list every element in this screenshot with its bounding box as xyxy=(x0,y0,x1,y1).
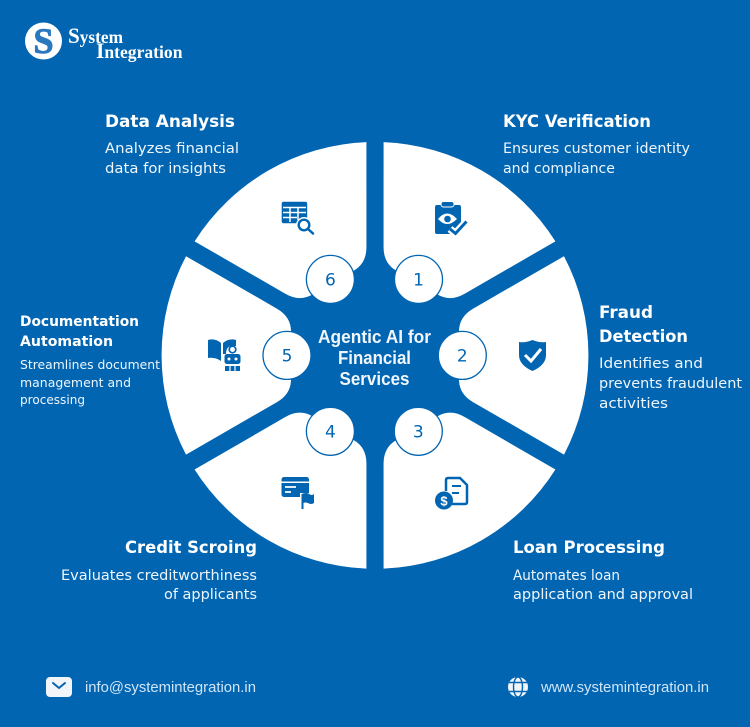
icon: document with dollar coin xyxy=(435,478,467,510)
icon: table with magnifier xyxy=(282,202,313,234)
text block: Documentation Automation xyxy=(20,314,160,407)
text block: KYC Verification: and compliance xyxy=(503,161,615,177)
icon: credit card with flag xyxy=(282,477,315,509)
logo: System Integration: Integration xyxy=(96,38,182,63)
text block: Documentation Automation: Documentation xyxy=(20,314,139,330)
text block: Fraud Detection xyxy=(599,303,743,412)
text block: Loan Processing xyxy=(513,538,693,603)
segment 5 xyxy=(162,256,291,455)
text block: Fraud Detection: activities xyxy=(599,396,668,412)
text block: KYC Verification: KYC Verification xyxy=(503,112,651,132)
badge 1: 1 xyxy=(413,270,424,290)
badge 4: 4 xyxy=(325,422,336,442)
badge 3 xyxy=(394,407,442,455)
text block: Credit Scroing xyxy=(61,538,257,603)
text block: Data Analysis: Analyzes financial xyxy=(105,141,239,157)
badge 4 xyxy=(306,407,354,455)
icon: globe xyxy=(508,677,528,697)
badge 2: 2 xyxy=(457,346,468,366)
text block: Data Analysis xyxy=(105,112,239,177)
icon: shield with check xyxy=(519,340,546,371)
segment 6 xyxy=(182,121,419,332)
text block: Fraud Detection: Detection xyxy=(599,327,688,347)
text block: Loan Processing: application and approval xyxy=(513,587,693,603)
text block: Documentation Automation: Streamlines document xyxy=(20,357,160,372)
text block: Loan Processing: Automates loan xyxy=(513,568,620,584)
segment 1 xyxy=(331,121,568,332)
email address: info@systemintegration.in xyxy=(85,680,256,696)
logo: System Integration: System xyxy=(68,23,123,48)
icon: email xyxy=(46,677,72,697)
badge 2 xyxy=(438,331,486,379)
badge 6 xyxy=(306,255,354,303)
icon: clipboard with eye and check xyxy=(435,202,466,234)
text block: Credit Scroing: Credit Scroing xyxy=(125,538,257,558)
segment 2 xyxy=(459,256,588,455)
text block: Credit Scroing: of applicants xyxy=(164,587,257,603)
text block: Fraud Detection: Fraud xyxy=(599,303,653,323)
text block: Fraud Detection: Identifies and xyxy=(599,356,703,372)
text block: KYC Verification: Ensures customer identity xyxy=(503,141,690,157)
logo: System Integration xyxy=(25,21,182,63)
heading: centre title: Agentic AI for xyxy=(318,327,431,347)
badge 3: 3 xyxy=(413,422,424,442)
heading: centre title: Services xyxy=(340,369,410,389)
text block: Data Analysis: Data Analysis xyxy=(105,112,235,132)
badge 5 xyxy=(263,331,311,379)
text block: Fraud Detection: prevents fraudulent xyxy=(599,376,743,392)
website address: www.systemintegration.in xyxy=(540,680,709,696)
badge 1 xyxy=(394,255,442,303)
wheel of six segments xyxy=(162,121,588,590)
text block: Loan Processing: Loan Processing xyxy=(513,538,665,558)
segment 4 xyxy=(182,379,419,590)
icon: book with robot xyxy=(208,339,240,371)
heading: centre title: Financial xyxy=(338,348,411,368)
text block: KYC Verification xyxy=(503,112,690,177)
text block: Documentation Automation: Automation xyxy=(20,334,113,350)
text block: Credit Scroing: Evaluates creditworthiness xyxy=(61,568,257,584)
heading: centre title xyxy=(318,327,431,389)
text block: Data Analysis: data for insights xyxy=(105,161,226,177)
badge 6: 6 xyxy=(325,270,336,290)
logo: System Integration: S xyxy=(33,21,54,61)
text block: Documentation Automation: management and xyxy=(20,375,131,390)
segment 3 xyxy=(331,379,568,590)
badge 5: 5 xyxy=(282,346,292,366)
text block: Documentation Automation: processing xyxy=(20,392,85,407)
icon: document with dollar coin: $ xyxy=(440,494,448,508)
